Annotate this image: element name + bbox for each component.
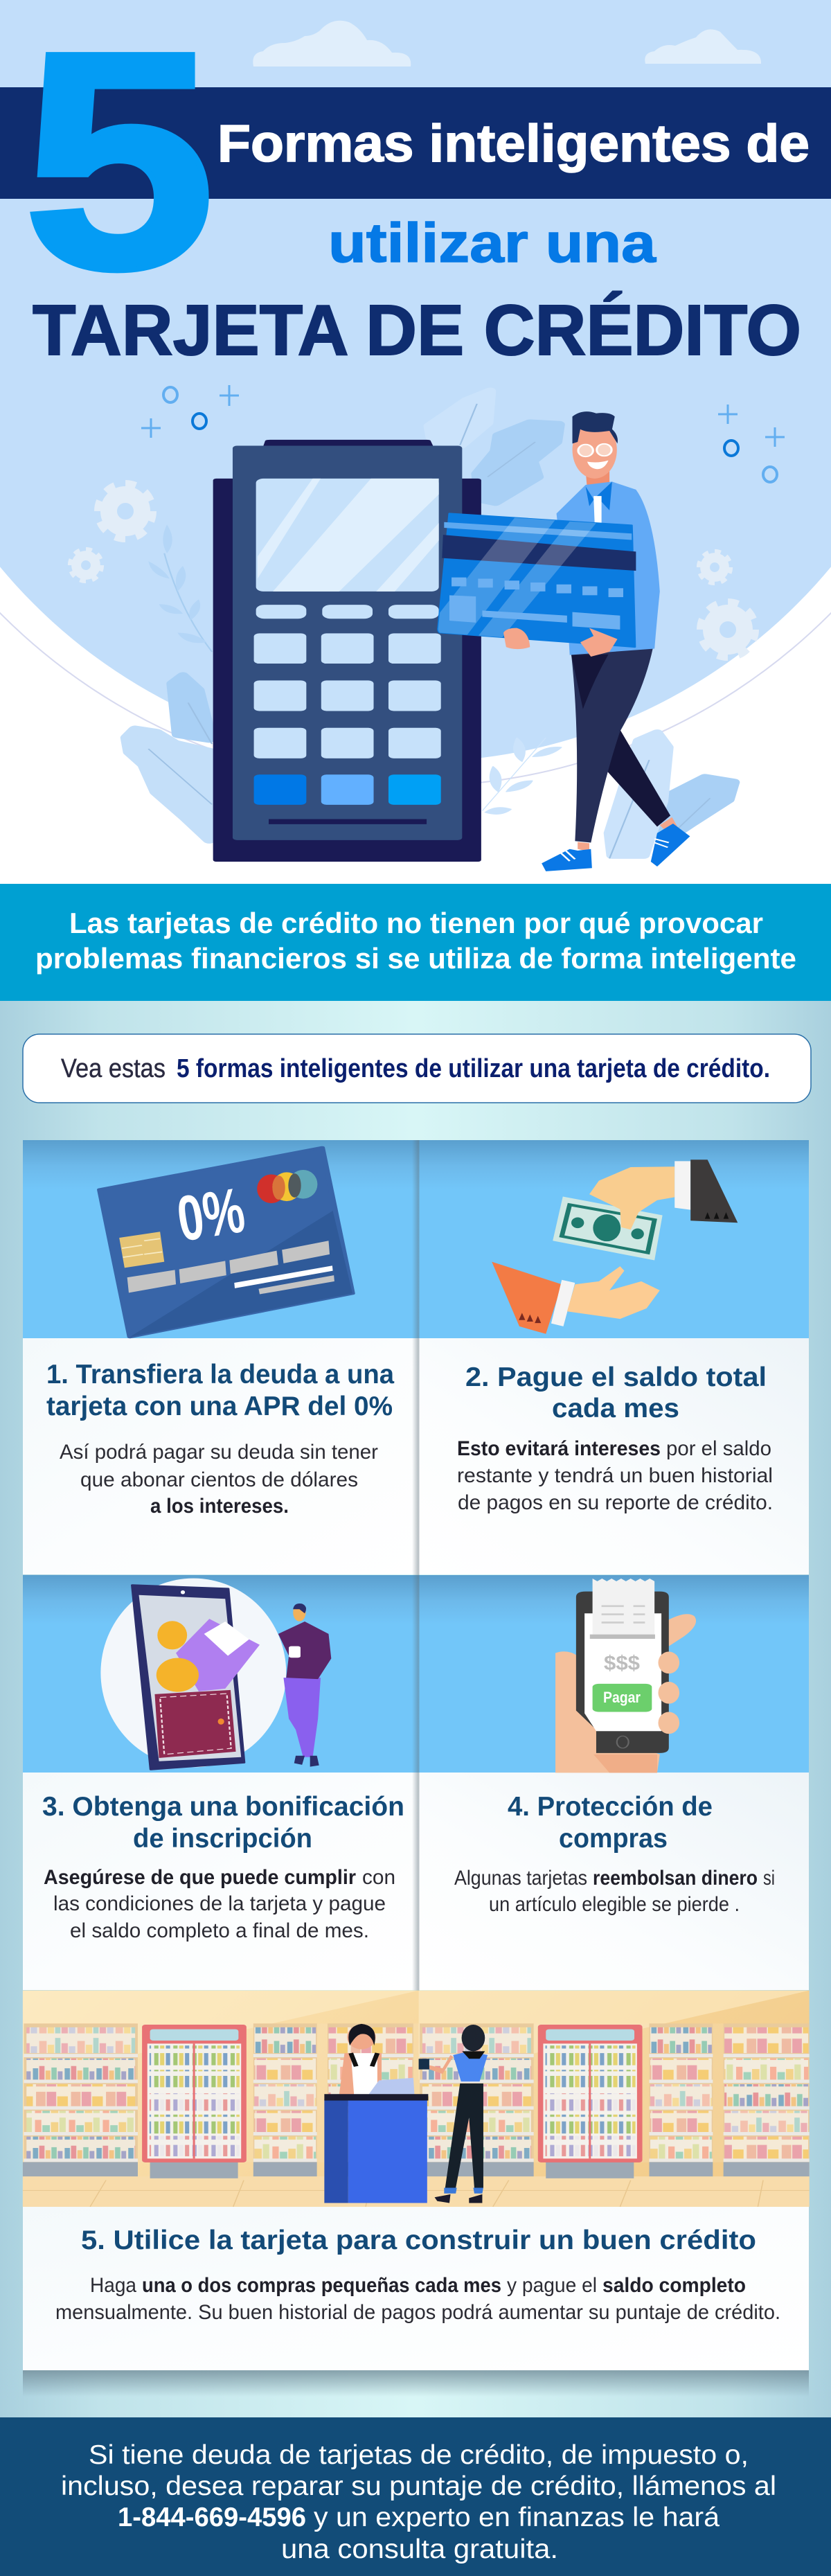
sparkles right <box>718 405 785 482</box>
body 2: restante y tendrá un buen historial <box>457 1464 773 1487</box>
body 4 <box>454 1867 775 1916</box>
body 2 <box>457 1437 773 1514</box>
body 3 <box>44 1866 395 1942</box>
man <box>542 411 690 871</box>
body 1: que abonar cientos de dólares <box>80 1468 358 1491</box>
heading 1 <box>46 1360 394 1421</box>
panel 2: pay full balance <box>419 1140 809 1574</box>
heading 5: 5. Utilice la tarjeta para construir un buen crédito <box>81 2226 756 2255</box>
footer call to action: una consulta gratuita. <box>281 2534 558 2564</box>
gear icon right <box>701 603 755 657</box>
customer <box>419 2025 488 2203</box>
heading 3: 3. Obtenga una bonificación <box>42 1792 404 1822</box>
body 2: de pagos en su reporte de crédito. <box>458 1491 773 1514</box>
footer call to action: Si tiene deuda de tarjetas de crédito, de impuesto o, <box>89 2440 749 2470</box>
title line: tarjeta de credito: TARJETA DE CRÉDITO <box>33 290 801 370</box>
body 3: el saldo completo a final de mes. <box>70 1919 369 1942</box>
heading 2: cada mes <box>552 1394 679 1423</box>
title line: utilizar una: utilizar una <box>328 212 656 274</box>
body 3: con <box>362 1866 395 1889</box>
heading 1: tarjeta con una APR del 0% <box>46 1392 393 1421</box>
phone wallet illustration <box>100 1579 331 1770</box>
column divider shadow <box>412 1140 420 2027</box>
heading 3: de inscripción <box>133 1824 312 1854</box>
body 2: Esto evitará intereses <box>457 1437 661 1460</box>
heading 2: 2. Pague el saldo total <box>465 1362 767 1392</box>
footer call to action: incluso, desea reparar su puntaje de crédito, llámenos al <box>61 2471 776 2501</box>
intro pill: 5 formas inteligentes de utilizar una tarjeta de crédito. <box>177 1054 770 1083</box>
gear icon small left <box>70 549 102 581</box>
footer call to action: y un experto en finanzas le hará <box>314 2503 720 2532</box>
cloud left <box>253 21 411 66</box>
counter <box>324 2094 428 2203</box>
phone pay illustration <box>555 1579 696 1773</box>
heading 3 <box>42 1792 404 1854</box>
card illustration <box>100 1148 352 1337</box>
tips background <box>0 1001 831 2417</box>
pay button label: Pagar <box>603 1689 641 1706</box>
money hands illustration <box>492 1160 738 1334</box>
body 5: saldo completo <box>602 2274 746 2297</box>
heading 1: 1. Transfiera la deuda a una <box>46 1360 394 1389</box>
body 5: Haga <box>90 2274 136 2297</box>
footer call to action: 1-844-669-4596 <box>118 2503 306 2532</box>
cash register <box>368 2078 414 2095</box>
body 4: reembolsan dinero <box>593 1867 758 1890</box>
body 2: por el saldo <box>666 1437 771 1460</box>
heading 2 <box>465 1362 767 1423</box>
sparkles left <box>141 385 239 438</box>
body 5: mensualmente. Su buen historial de pagos podrá aumentar su puntaje de crédito. <box>55 2301 780 2324</box>
panel 5: build credit <box>23 1991 810 2370</box>
cashier <box>339 2024 382 2095</box>
body 5: y pague el <box>507 2274 597 2297</box>
dollar signs: $$$ <box>604 1652 640 1675</box>
store illustration <box>23 1991 810 2207</box>
illustration: terminal and man with card <box>127 391 734 871</box>
panel 4: purchase protection <box>419 1575 809 1990</box>
title line: Formas inteligentes de: Formas inteligentes de <box>217 114 810 173</box>
heading 4: 4. Protección de <box>508 1792 713 1822</box>
body 1: a los intereses. <box>150 1495 289 1518</box>
body 3: las condiciones de la tarjeta y pague <box>53 1892 386 1915</box>
intro pill: Vea estas <box>61 1054 166 1083</box>
body 1: Así podrá pagar su deuda sin tener <box>60 1441 378 1464</box>
body 5: una o dos compras pequeñas cada mes <box>142 2274 501 2297</box>
hero section <box>0 0 831 786</box>
panel bottom shadow <box>23 2370 809 2397</box>
teal intro banner: Las tarjetas de crédito no tienen por qué provocar <box>69 907 763 939</box>
title band <box>0 87 831 199</box>
payment terminal <box>213 440 481 862</box>
body 4: un artículo elegible se pierde . <box>489 1893 740 1916</box>
teal intro banner: problemas financieros si se utiliza de forma inteligente <box>35 942 796 975</box>
body 4: si <box>763 1867 775 1890</box>
panel 3: signup bonus <box>23 1575 419 1990</box>
body 1 <box>60 1441 378 1518</box>
cloud right <box>645 29 761 64</box>
big credit card <box>424 513 636 657</box>
zero percent label: 0% <box>172 1175 249 1255</box>
intro pill <box>23 1034 811 1103</box>
body 5 <box>55 2274 780 2324</box>
panel 1: transfer debt <box>23 1140 419 1574</box>
gear icon small right <box>699 551 731 583</box>
teal intro banner <box>0 884 831 1001</box>
footer call to action <box>0 2417 831 2576</box>
heading 4 <box>508 1792 713 1854</box>
body 3: Asegúrese de que puede cumplir <box>44 1866 356 1889</box>
heading 4: compras <box>559 1824 668 1854</box>
gear icon top left <box>98 484 152 538</box>
body 4: Algunas tarjetas <box>454 1867 587 1890</box>
plants behind <box>127 391 734 858</box>
